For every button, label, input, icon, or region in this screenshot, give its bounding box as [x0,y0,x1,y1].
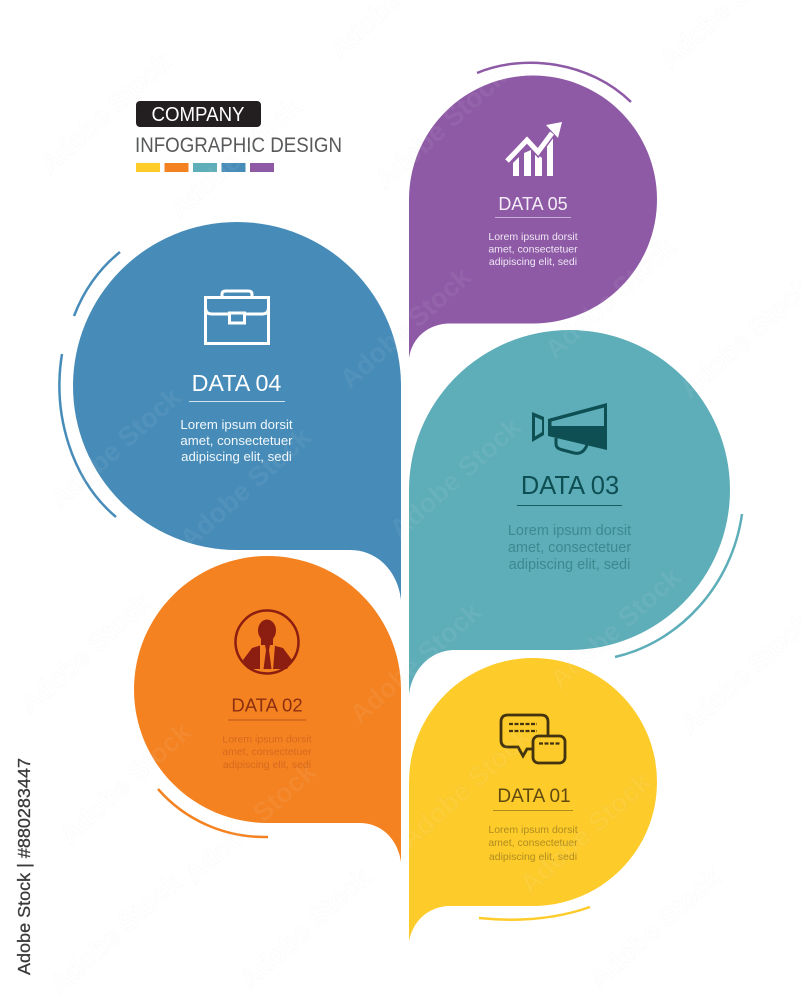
watermark: Adobe Stock [44,381,187,514]
arc: yellow [479,907,590,920]
watermark: Adobe Stock [544,561,687,694]
heading: data 04: DATA 04 [192,370,281,396]
watermark: Adobe Stock [14,586,157,719]
watermark: Adobe Stock [384,411,527,544]
watermark: Adobe Stock [539,231,682,364]
watermark: Adobe Stock [334,261,477,394]
text block: amet, consectetuer [508,540,631,556]
stock credit: Adobe Stock | #880283447 [14,758,34,975]
text block [508,523,631,573]
watermark: Adobe Stock [164,91,307,224]
text block: Lorem ipsum dorsit [488,231,578,243]
arc: teal [615,514,742,657]
text block: adipiscing elit, sedi [181,449,292,464]
arc: purple [477,63,631,102]
text block [488,231,578,268]
bubble: purple [409,76,657,358]
company badge: COMPANY [152,104,244,126]
arc: orange [158,789,268,837]
divider [189,401,285,402]
text block [180,417,293,464]
heading: data 05: DATA 05 [498,194,568,214]
watermark: Adobe Stock [514,766,657,899]
watermark: Adobe Stock [234,861,377,994]
panel: data 02 [134,556,401,862]
text block: adipiscing elit, sedi [223,759,311,771]
watermark: Adobe Stock [174,421,317,554]
subtitle: INFOGRAPHIC DESIGN [135,133,342,157]
text block: Lorem ipsum dorsit [180,417,293,432]
icon: businessman [236,610,298,674]
divider [517,505,622,506]
watermark: Adobe Stock [369,61,512,194]
bubble: yellow [409,658,657,942]
text block [222,734,312,771]
watermark: Adobe Stock [179,756,322,889]
header: company title block [135,101,342,172]
watermark: Adobe Stock [344,596,487,729]
icon: growth chart [507,122,562,176]
icon: briefcase [206,291,268,344]
panel: data 01 [409,658,657,942]
text block: adipiscing elit, sedi [489,851,577,863]
text block: Lorem ipsum dorsit [508,523,631,539]
arc: blue lower [59,354,116,517]
icon: chat bubbles [501,715,565,763]
watermark: Adobe Stock [584,861,727,994]
text block: amet, consectetuer [222,746,312,758]
text block: amet, consectetuer [180,433,293,448]
arc: blue upper [74,252,120,316]
watermark: Adobe Stock [394,721,537,854]
watermark: Adobe Stock [54,716,197,849]
text block: amet, consectetuer [488,244,578,256]
heading: data 02: DATA 02 [231,694,303,716]
bubble: orange [134,556,401,862]
panel: data 03 [409,330,742,695]
watermark: Adobe Stock [44,866,187,999]
divider [493,810,573,811]
bubble: teal [409,330,730,695]
panel: data 04 [59,222,401,600]
text block [488,824,578,863]
colour legend [136,163,274,172]
bubble: blue [73,222,401,600]
company badge [136,101,261,127]
text block: Lorem ipsum dorsit [222,734,312,746]
heading: data 03: DATA 03 [521,472,619,500]
heading: data 01: DATA 01 [497,786,571,807]
text block: Lorem ipsum dorsit [488,824,578,836]
text block: adipiscing elit, sedi [489,256,577,268]
panel: data 05 [409,63,657,358]
divider [228,720,306,721]
watermark: Adobe Stock [34,46,177,179]
text block: adipiscing elit, sedi [509,557,630,573]
text block: amet, consectetuer [488,837,578,849]
divider [495,217,571,218]
icon: megaphone [532,403,607,453]
